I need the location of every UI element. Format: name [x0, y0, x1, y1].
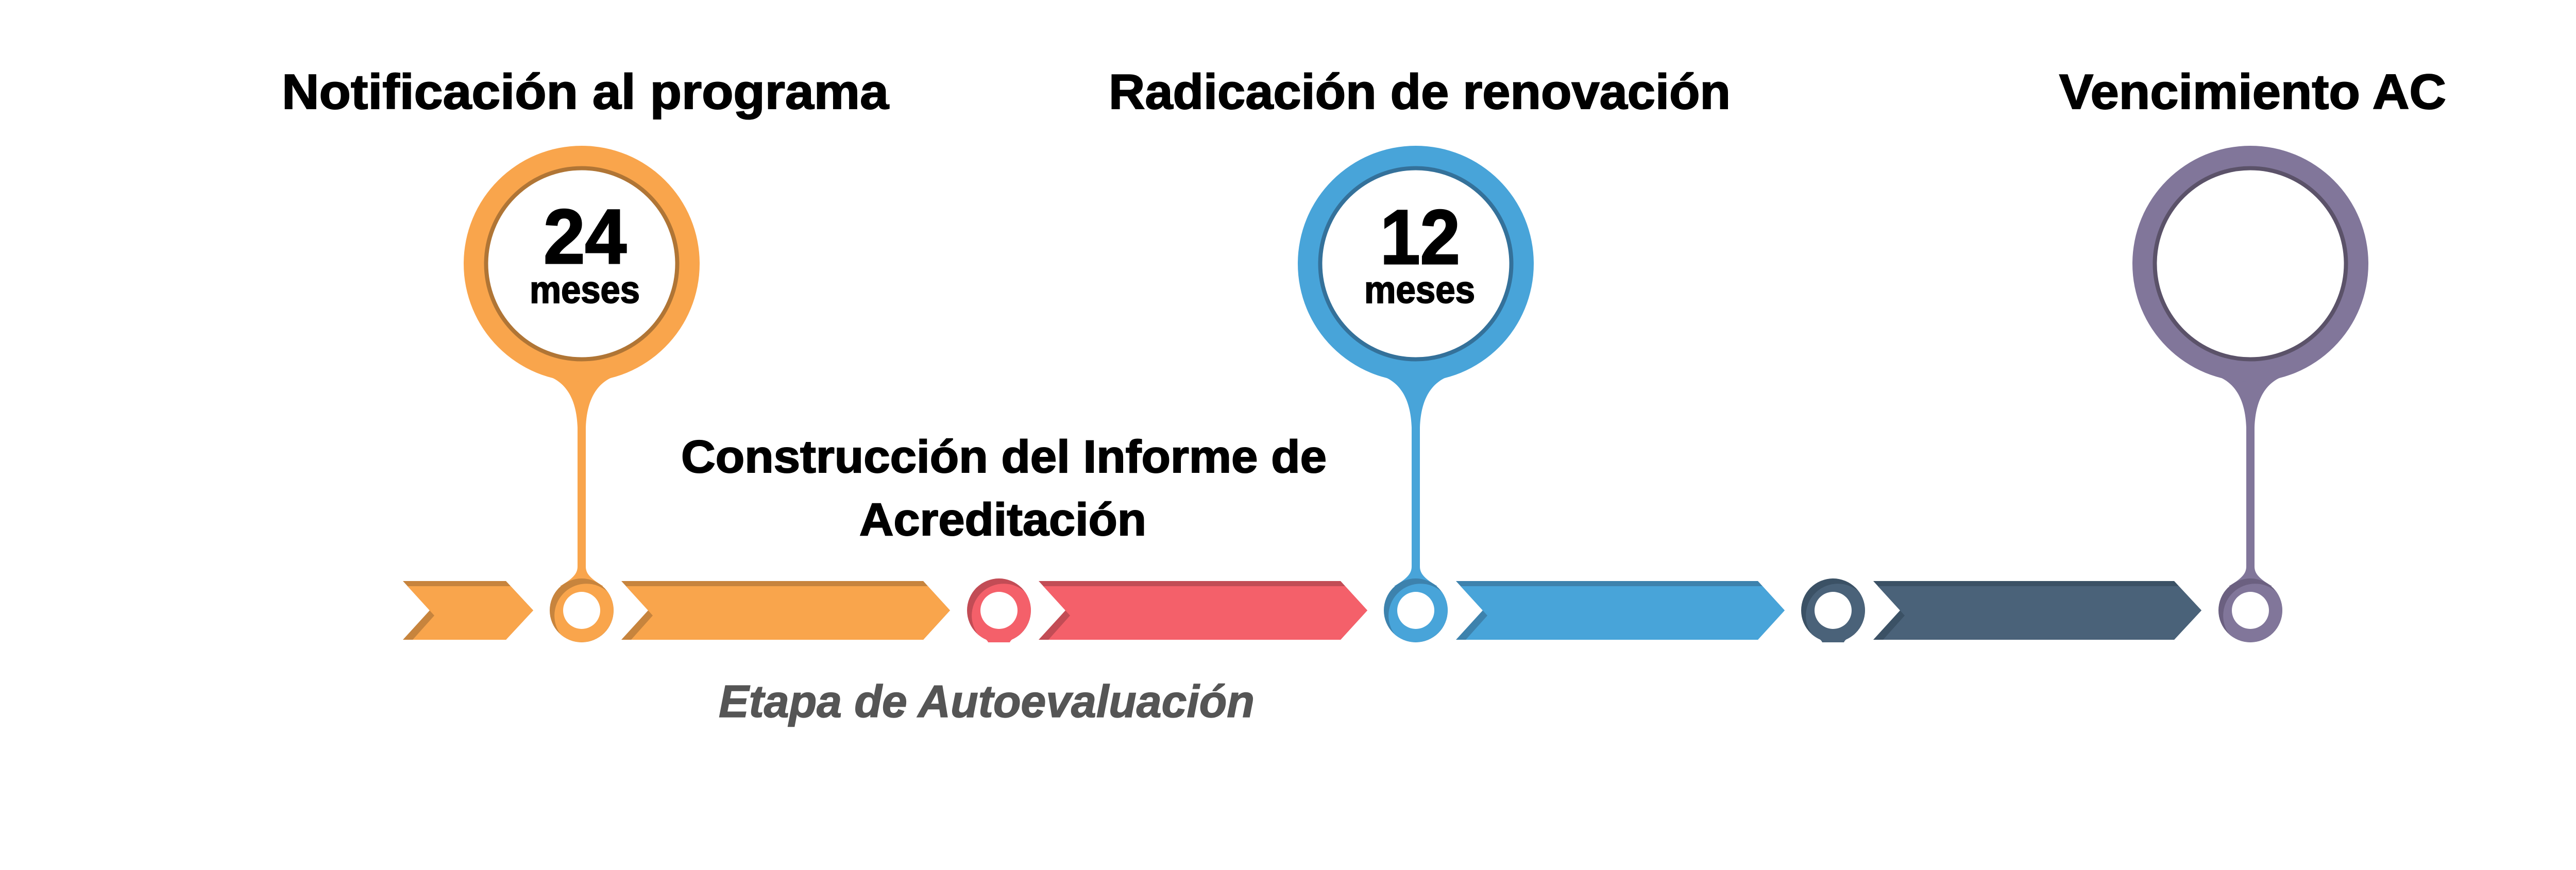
label: meses: meses — [1364, 268, 1475, 311]
heading: Notificación al programa: Notificación al programa — [282, 64, 889, 120]
pin: Vencimiento AC (purple) — [2132, 146, 2368, 586]
pin inner circle purple — [2155, 168, 2346, 360]
number: 12: 12 — [1380, 194, 1460, 280]
arrow: long orange chevron — [621, 581, 950, 640]
heading line 1: Construcción del Informe de — [681, 431, 1327, 482]
pin stem orange — [545, 375, 619, 586]
ring marker orange — [550, 578, 614, 642]
heading: Construcción del Informe de Acreditación — [681, 431, 1327, 545]
pin: 24 meses (orange) — [464, 146, 700, 586]
pin inner circle orange — [486, 168, 677, 360]
heading: Radicación de renovación: Radicación de renovación — [1109, 64, 1731, 120]
pin stem purple — [2213, 375, 2287, 586]
number: 24: 24 — [544, 193, 626, 280]
pin head purple — [2132, 146, 2368, 382]
arrow: red chevron — [1039, 581, 1367, 640]
arrow: blue chevron — [1456, 581, 1785, 640]
ring marker red — [967, 578, 1031, 642]
heading line 2: Acreditación — [859, 493, 1146, 545]
ring marker blue — [1384, 578, 1448, 642]
pin inner circle blue — [1320, 168, 1512, 360]
arrow: short orange chevron — [403, 581, 533, 640]
heading: Vencimiento AC: Vencimiento AC — [2059, 64, 2446, 120]
ring marker purple — [2218, 578, 2282, 642]
pin stem blue — [1379, 375, 1453, 586]
caption: Etapa de Autoevaluación: Etapa de Autoevaluación — [719, 676, 1255, 727]
pin: 12 meses (blue) — [1298, 146, 1534, 586]
pin head blue — [1298, 146, 1534, 382]
ring marker dark blue — [1801, 578, 1865, 642]
arrow: dark blue chevron — [1873, 581, 2201, 640]
pin head orange — [464, 146, 700, 382]
label: meses: meses — [530, 268, 640, 311]
